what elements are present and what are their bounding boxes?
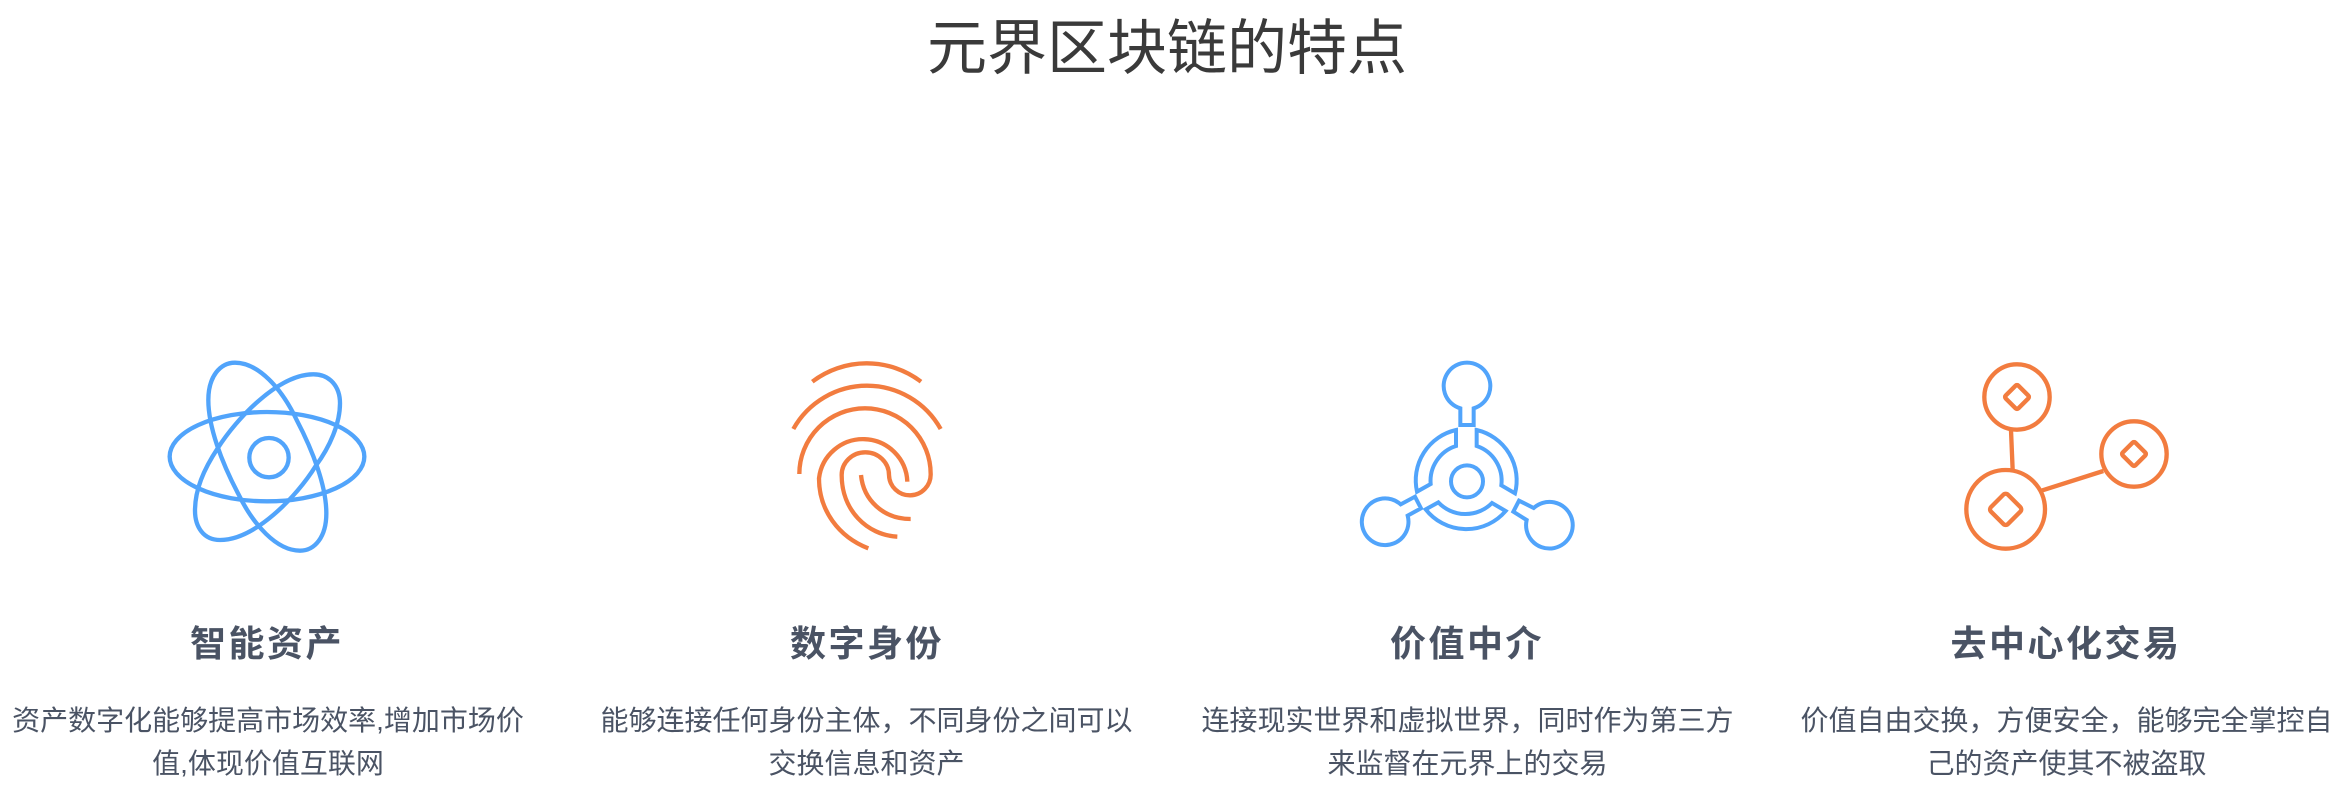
text: 智能资产 description: 值,体现价值互联网 <box>152 748 384 779</box>
title: 元界区块链的特点 <box>927 15 1407 82</box>
heading: 去中心化交易: 去中心化交易 <box>1950 623 2182 664</box>
text: 智能资产 description <box>12 705 524 779</box>
icon: atom <box>168 360 366 553</box>
text: 数字身份 description <box>600 705 1132 779</box>
text: 数字身份 description: 交换信息和资产 <box>768 748 964 779</box>
text: 价值中介 description: 来监督在元界上的交易 <box>1327 748 1608 779</box>
icon: hub <box>1360 360 1575 550</box>
text: 去中心化交易 description <box>1800 705 2332 779</box>
icon: network nodes <box>1964 362 2169 551</box>
heading: 智能资产: 智能资产 <box>190 623 344 664</box>
text: 智能资产 description: 资产数字化能够提高市场效率,增加市场价 <box>12 705 524 736</box>
text: 价值中介 description: 连接现实世界和虚拟世界，同时作为第三方 <box>1201 705 1734 736</box>
text: 去中心化交易 description: 己的资产使其不被盗取 <box>1926 748 2206 779</box>
text: 数字身份 description: 能够连接任何身份主体，不同身份之间可以 <box>600 705 1132 736</box>
text: 价值中介 description <box>1201 705 1734 779</box>
text: 去中心化交易 description: 价值自由交换，方便安全，能够完全掌控自 <box>1800 705 2332 736</box>
icon: fingerprint <box>792 361 942 550</box>
heading: 数字身份: 数字身份 <box>790 623 944 664</box>
heading: 价值中介: 价值中介 <box>1390 623 1544 664</box>
